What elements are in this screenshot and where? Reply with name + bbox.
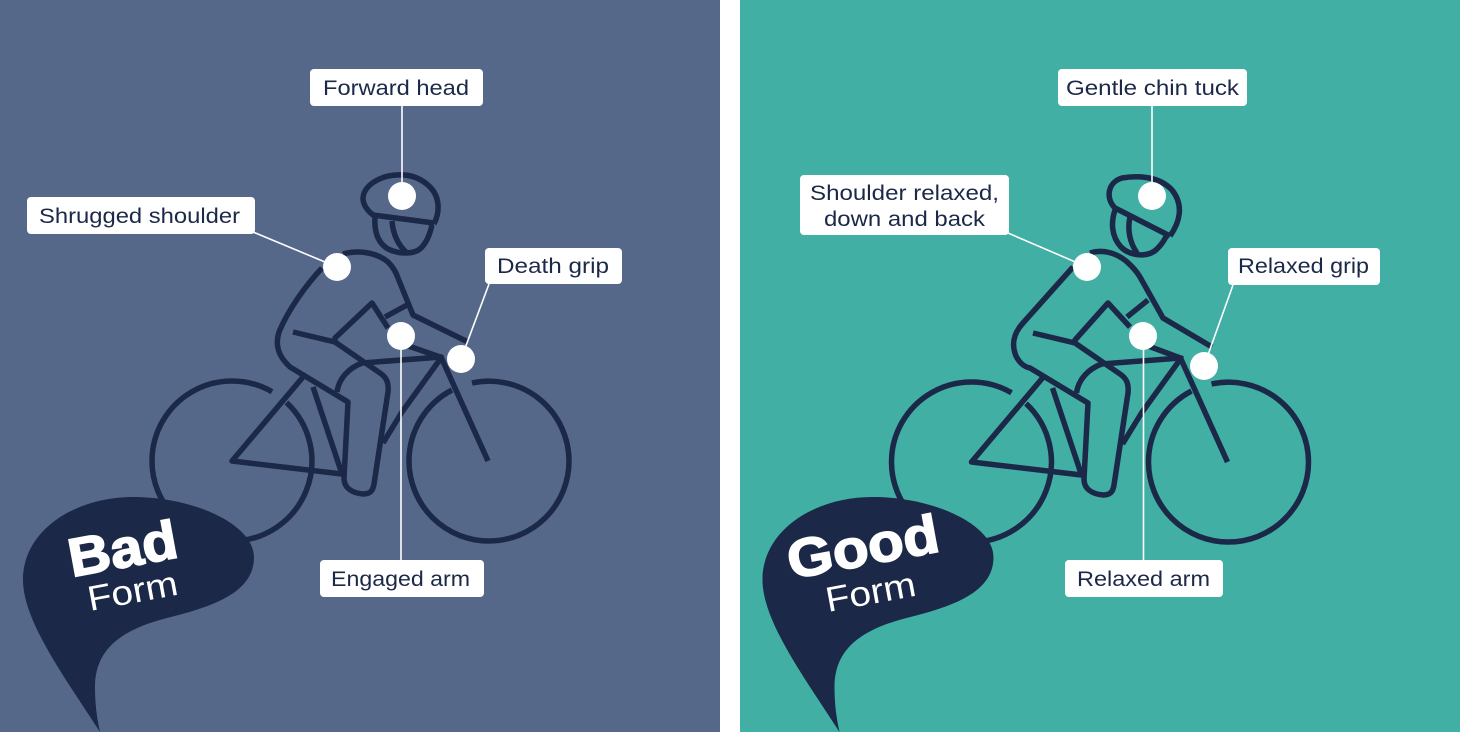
heading: bad: Bad (63, 510, 182, 589)
label: shoulder relaxed: down and back (824, 208, 986, 231)
marker dots: good form (1073, 182, 1218, 380)
label: death grip: Death grip (497, 255, 609, 278)
panel: bad form (0, 0, 720, 732)
label: relaxed grip: Relaxed grip (1238, 255, 1369, 278)
leader lines: good form (1008, 106, 1233, 560)
callout: good form bubble (762, 497, 994, 732)
panel: good form (740, 0, 1460, 732)
callout: bad form bubble (23, 497, 254, 732)
label: shrugged shoulder: Shrugged shoulder (39, 205, 240, 228)
label: relaxed arm: Relaxed arm (1077, 568, 1210, 591)
label: shrugged shoulder (27, 197, 255, 234)
icon: good form bicycle (892, 358, 1308, 542)
icon: good form rider (1014, 177, 1212, 495)
icon: bad form bicycle (152, 357, 569, 541)
label: forward head: Forward head (323, 77, 469, 100)
leader lines: bad form (253, 106, 489, 560)
subheading: form: Form (822, 565, 919, 620)
heading: good: Good (782, 504, 944, 591)
label: death grip (485, 248, 622, 284)
label: shoulder relaxed: Shoulder relaxed, (810, 182, 999, 205)
label: relaxed arm (1065, 560, 1223, 597)
label: shoulder relaxed (800, 175, 1009, 235)
label: relaxed grip (1228, 248, 1380, 285)
subheading: form: Form (84, 564, 181, 619)
marker dots: bad form (323, 182, 475, 373)
label: gentle chin tuck (1058, 69, 1247, 106)
label: forward head (310, 69, 483, 106)
icon: bad form rider (277, 175, 468, 494)
label: engaged arm (320, 560, 484, 597)
label: gentle chin tuck: Gentle chin tuck (1066, 77, 1240, 100)
label: engaged arm: Engaged arm (331, 568, 470, 591)
